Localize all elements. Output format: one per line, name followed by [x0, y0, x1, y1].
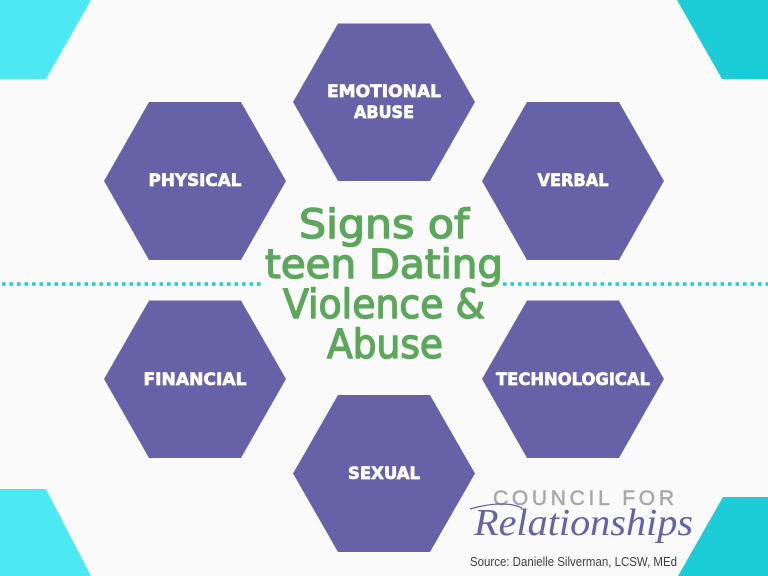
title: Abuse — [327, 322, 443, 368]
title: Signs of — [299, 202, 470, 248]
title: Violence & — [283, 282, 485, 328]
corner shape: top right — [677, 0, 768, 79]
corner shape: bottom left — [0, 489, 91, 576]
hexagon: technological: TECHNOLOGICAL — [496, 370, 650, 390]
hexagon: financial — [104, 300, 286, 458]
dotted divider: right — [503, 282, 768, 286]
hexagon: emotional abuse: ABUSE — [354, 103, 414, 123]
corner shape: top left — [0, 0, 91, 79]
hexagon: financial: FINANCIAL — [144, 370, 247, 390]
hexagon: verbal: VERBAL — [538, 171, 609, 191]
hexagon: physical: PHYSICAL — [148, 171, 242, 191]
hexagon: emotional abuse: EMOTIONAL — [327, 82, 441, 102]
dotted divider: left — [2, 282, 262, 286]
logo: Council for Relationships — [470, 487, 693, 544]
title: teen Dating — [265, 242, 503, 288]
hexagon: sexual: SEXUAL — [348, 464, 420, 484]
logo: Council for Relationships: Relationships — [473, 502, 693, 544]
source credit: Source: Danielle Silverman, LCSW, MEd — [470, 555, 677, 569]
hexagon: technological — [482, 300, 664, 458]
logo: Council for Relationships: COUNCIL FOR — [493, 487, 674, 510]
hexagon: sexual — [293, 395, 475, 552]
title — [265, 202, 503, 368]
hexagon: verbal — [482, 102, 664, 260]
hexagon: emotional abuse — [293, 24, 475, 181]
hexagon: physical — [104, 102, 286, 260]
corner shape: bottom right — [678, 497, 768, 576]
